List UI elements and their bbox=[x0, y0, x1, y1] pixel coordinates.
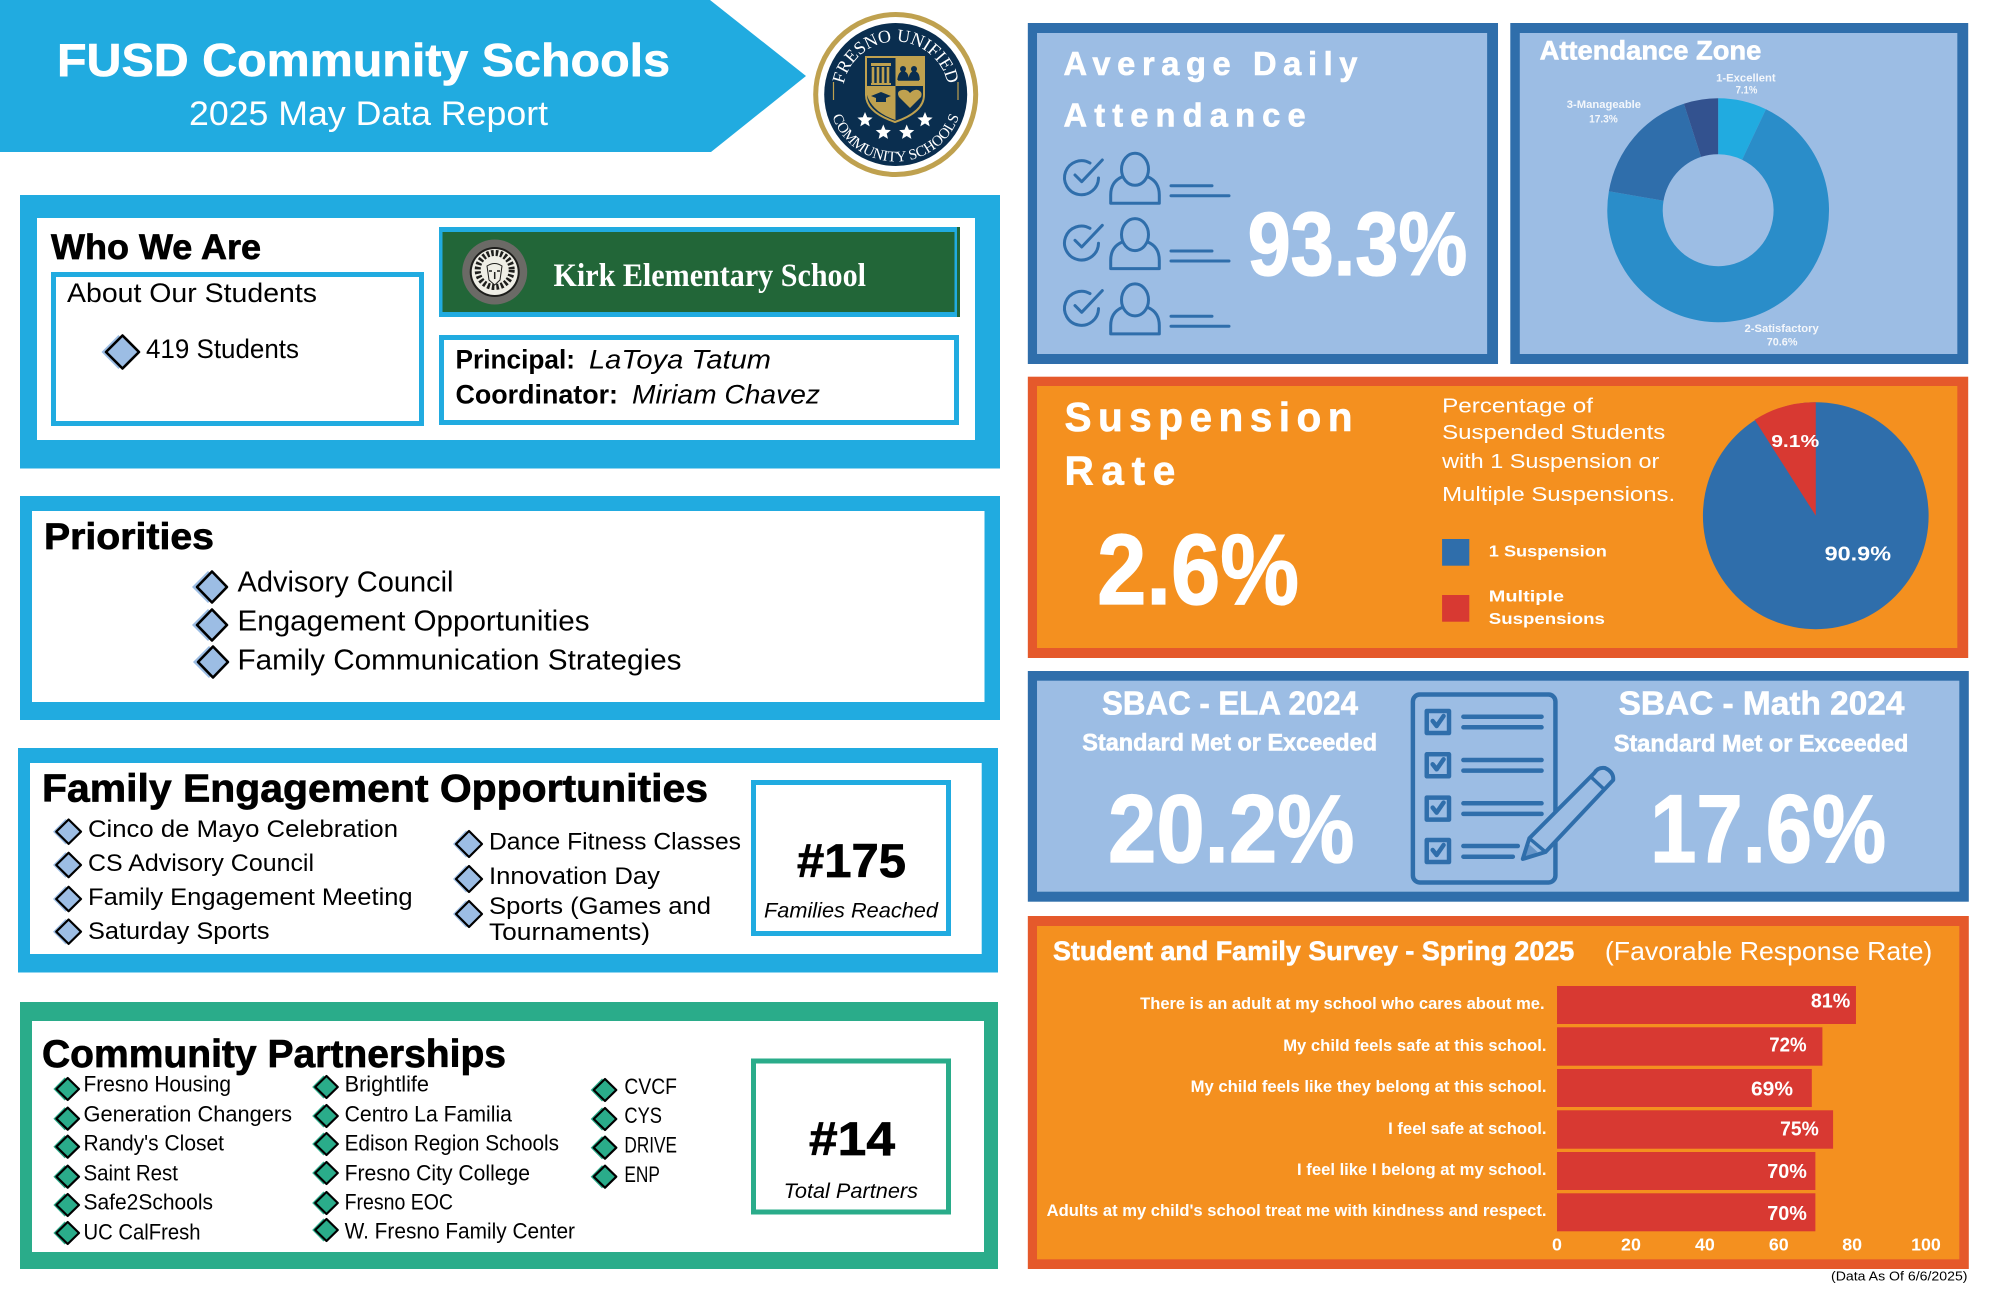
x axis ticks bbox=[1552, 1235, 1941, 1255]
donut labels: 3-Manageable bbox=[1567, 99, 1641, 111]
icon row two bbox=[1065, 219, 1229, 269]
school name banner: Kirk Elementary School bbox=[554, 258, 866, 294]
donut labels: 1-Excellent bbox=[1716, 73, 1776, 85]
description text: Percentage of bbox=[1442, 396, 1594, 418]
panel: priorities bbox=[20, 496, 1000, 720]
list: engagement column one: Saturday Sports bbox=[88, 918, 270, 945]
bar: feel safe 75% bbox=[1388, 1110, 1833, 1149]
bar: child feels safe 72%: My child feels safe at this school. bbox=[1283, 1036, 1547, 1055]
list: engagement column one bbox=[53, 816, 413, 945]
x axis ticks: 80 bbox=[1842, 1235, 1862, 1255]
heading: survey title: (Favorable Response Rate) bbox=[1605, 938, 1932, 966]
stat: 2.6%: 2.6% bbox=[1097, 515, 1299, 626]
heading: community partnerships: Community Partnerships bbox=[42, 1033, 506, 1076]
subtitle: 2025 May Data Report bbox=[189, 95, 549, 133]
panel frame and fill bbox=[1510, 23, 1968, 364]
panel: average daily attendance bbox=[1028, 23, 1498, 364]
donut labels: 17.3% bbox=[1589, 114, 1618, 126]
x axis ticks: 0 bbox=[1552, 1235, 1562, 1255]
list: partners column two: Fresno City College bbox=[345, 1160, 530, 1186]
description text: Multiple Suspensions. bbox=[1442, 484, 1675, 506]
x axis ticks: 60 bbox=[1769, 1235, 1789, 1255]
bar: feel I belong 70%: 70% bbox=[1767, 1161, 1807, 1183]
bar: feel I belong 70% bbox=[1297, 1152, 1815, 1190]
panel frame and fill bbox=[1028, 916, 1969, 1269]
donut chart: attendance zones bbox=[1607, 98, 1829, 322]
priority: advisory council: Advisory Council bbox=[238, 567, 454, 599]
legend: 1 Suspension bbox=[1489, 544, 1607, 561]
legend bbox=[1442, 539, 1607, 628]
x axis ticks: 20 bbox=[1621, 1235, 1641, 1255]
list: partners column three: ENP bbox=[624, 1162, 660, 1187]
bar: feel safe 75%: 75% bbox=[1780, 1119, 1819, 1141]
list: partners column three: CYS bbox=[624, 1103, 662, 1128]
heading: survey title: Student and Family Survey - Spring 2025 bbox=[1053, 936, 1574, 966]
icon: Fresno Unified Community Schools seal: FRESNO UNIFIED bbox=[832, 30, 958, 84]
bar: cares about me 81%: 81% bbox=[1811, 991, 1851, 1013]
legend: Multiple bbox=[1489, 589, 1564, 606]
icon row three bbox=[1065, 284, 1229, 334]
bar: kindness and respect 70%: Adults at my child's school treat me with kindness and respect. bbox=[1047, 1201, 1547, 1220]
pie chart: suspensions bbox=[1703, 402, 1929, 629]
bar: child feels safe 72%: 72% bbox=[1769, 1035, 1807, 1057]
priority: engagement opportunities: Engagement Opportunities bbox=[238, 606, 590, 638]
heading: priorities: Priorities bbox=[44, 516, 214, 557]
list: engagement column two bbox=[453, 828, 741, 946]
bar: child belongs 69%: My child feels like they belong at this school. bbox=[1191, 1077, 1547, 1096]
icon: school lion crest bbox=[462, 240, 527, 304]
pie chart: suspensions: 9.1% bbox=[1771, 431, 1819, 451]
bar: kindness and respect 70%: 70% bbox=[1767, 1203, 1807, 1225]
description text: Suspended Students bbox=[1442, 422, 1665, 444]
box: about our students: About Our Students bbox=[67, 278, 317, 308]
x axis ticks: 40 bbox=[1695, 1235, 1715, 1255]
panel frame and fill bbox=[1028, 377, 1968, 658]
heading: suspension rate: Suspension bbox=[1064, 394, 1353, 440]
box: principal and coordinator: LaToya Tatum bbox=[589, 344, 771, 374]
heading: average daily attendance bbox=[1063, 45, 1358, 134]
panel frame bbox=[20, 1002, 998, 1269]
list: partners column one: Fresno Housing bbox=[84, 1072, 231, 1097]
stat: 93.3%: 93.3% bbox=[1248, 194, 1467, 294]
stat box: total partners bbox=[754, 1061, 948, 1212]
description text: with 1 Suspension or bbox=[1441, 451, 1660, 473]
heading: family engagement opportunities: Family Engagement Opportunities bbox=[42, 768, 708, 811]
SBAC ELA block bbox=[1082, 684, 1377, 883]
SBAC Math block bbox=[1614, 684, 1908, 883]
SBAC Math block: Standard Met or Exceeded bbox=[1614, 731, 1908, 758]
list: partners column one bbox=[53, 1072, 292, 1244]
SBAC ELA block: Standard Met or Exceeded bbox=[1082, 730, 1377, 757]
list: engagement column two: Tournaments) bbox=[489, 919, 650, 946]
SBAC ELA block: 20.2% bbox=[1108, 776, 1354, 883]
icon: Fresno Unified Community Schools seal bbox=[813, 12, 978, 177]
icon: Fresno Unified Community Schools seal: COMMUNITY SCHOOLS bbox=[834, 114, 958, 162]
list: partners column one: UC CalFresh bbox=[84, 1220, 200, 1244]
list: partners column one: Saint Rest bbox=[84, 1160, 178, 1186]
stat box: families reached: #175 bbox=[797, 834, 906, 887]
box: principal and coordinator: Coordinator: bbox=[456, 380, 618, 410]
list: engagement column two: Sports (Games and bbox=[489, 893, 711, 920]
box: principal and coordinator bbox=[442, 338, 956, 422]
heading: average daily attendance: Attendance bbox=[1063, 97, 1306, 134]
banner arrow shape bbox=[0, 0, 806, 152]
bar: cares about me 81% bbox=[1140, 986, 1856, 1024]
bar: kindness and respect 70% bbox=[1047, 1193, 1815, 1231]
list: engagement column two: Dance Fitness Classes bbox=[489, 828, 741, 856]
panel: family engagement opportunities bbox=[18, 748, 998, 972]
list: partners column two: Fresno EOC bbox=[345, 1190, 453, 1214]
bar: feel I belong 70%: I feel like I belong at my school. bbox=[1297, 1160, 1547, 1179]
panel: SBAC scores bbox=[1028, 671, 1969, 902]
panel: community partnerships bbox=[20, 1002, 998, 1269]
list: engagement column one: Cinco de Mayo Celebration bbox=[88, 816, 398, 843]
panel: who we are bbox=[20, 195, 1000, 468]
panel frame bbox=[20, 195, 1000, 468]
box: about our students bbox=[54, 274, 422, 424]
list: engagement column two: Innovation Day bbox=[489, 863, 660, 890]
list: partners column two: Edison Region Schools bbox=[345, 1131, 559, 1156]
list: partners column one: Safe2Schools bbox=[84, 1190, 213, 1214]
description text bbox=[1441, 396, 1675, 506]
list: partners column three bbox=[591, 1074, 677, 1188]
panel frame bbox=[18, 748, 998, 972]
heading: survey title bbox=[1053, 936, 1932, 966]
heading: who we are: Who We Are bbox=[51, 228, 261, 267]
panel: suspension rate bbox=[1028, 377, 1968, 658]
icon row one bbox=[1065, 153, 1229, 203]
list: partners column two: Centro La Familia bbox=[345, 1102, 513, 1127]
list: engagement column one: CS Advisory Council bbox=[88, 850, 314, 877]
school name banner bbox=[439, 227, 960, 317]
SBAC ELA block: SBAC - ELA 2024 bbox=[1102, 684, 1359, 721]
bar: feel safe 75%: I feel safe at school. bbox=[1388, 1119, 1547, 1138]
list: partners column two: Brightlife bbox=[345, 1072, 429, 1096]
list: engagement column one: Family Engagement Meeting bbox=[88, 884, 413, 911]
panel: student and family survey bbox=[1028, 916, 1969, 1269]
legend: Suspensions bbox=[1489, 611, 1605, 628]
heading: attendance zone: Attendance Zone bbox=[1540, 35, 1761, 65]
list: partners column two: W. Fresno Family Center bbox=[345, 1218, 575, 1244]
icon: diamond bullet bbox=[102, 335, 139, 369]
pie chart: suspensions: 90.9% bbox=[1825, 544, 1891, 566]
box: principal and coordinator: Principal: bbox=[456, 344, 575, 374]
stat box: families reached: Families Reached bbox=[764, 900, 939, 923]
donut labels: 70.6% bbox=[1767, 337, 1798, 349]
icon: checklist and pencil bbox=[1413, 694, 1613, 882]
list: partners column three: CVCF bbox=[624, 1074, 677, 1099]
footnote: data date: (Data As Of 6/6/2025) bbox=[1831, 1269, 1968, 1284]
stat box: total partners: #14 bbox=[809, 1112, 895, 1165]
bar chart: favorable response rates bbox=[1047, 986, 1941, 1255]
donut labels: 2-Satisfactory bbox=[1744, 323, 1820, 335]
list: partners column one: Generation Changers bbox=[84, 1102, 292, 1127]
header banner bbox=[0, 0, 806, 152]
donut labels: 7.1% bbox=[1736, 85, 1758, 97]
icon: attendance check-ins bbox=[1065, 153, 1229, 334]
priority: family communication strategies: Family Communication Strategies bbox=[238, 645, 682, 677]
stat box: families reached bbox=[754, 782, 948, 934]
donut labels bbox=[1567, 73, 1820, 349]
box: about our students: 419 Students bbox=[146, 334, 299, 364]
panel frame and fill bbox=[1028, 23, 1498, 364]
heading: suspension rate bbox=[1064, 394, 1353, 494]
bar: child belongs 69% bbox=[1191, 1069, 1812, 1107]
title: FUSD Community Schools bbox=[57, 34, 670, 86]
heading: average daily attendance: Average Daily bbox=[1063, 45, 1358, 82]
panel: attendance zone bbox=[1510, 23, 1968, 364]
stat box: total partners: Total Partners bbox=[784, 1180, 919, 1203]
list: partners column three: DRIVE bbox=[624, 1133, 677, 1158]
SBAC Math block: 17.6% bbox=[1650, 776, 1886, 883]
panel frame and fill bbox=[1028, 671, 1969, 902]
SBAC Math block: SBAC - Math 2024 bbox=[1619, 684, 1905, 721]
bar: child belongs 69%: 69% bbox=[1751, 1079, 1793, 1101]
bar: child feels safe 72% bbox=[1283, 1027, 1822, 1066]
panel frame bbox=[20, 496, 1000, 720]
heading: suspension rate: Rate bbox=[1064, 448, 1175, 494]
box: principal and coordinator: Miriam Chavez bbox=[632, 380, 821, 410]
list: partners column two bbox=[312, 1072, 575, 1244]
x axis ticks: 100 bbox=[1911, 1235, 1941, 1255]
bar: cares about me 81%: There is an adult at my school who cares about me. bbox=[1140, 994, 1545, 1013]
list: partners column one: Randy's Closet bbox=[84, 1131, 224, 1156]
